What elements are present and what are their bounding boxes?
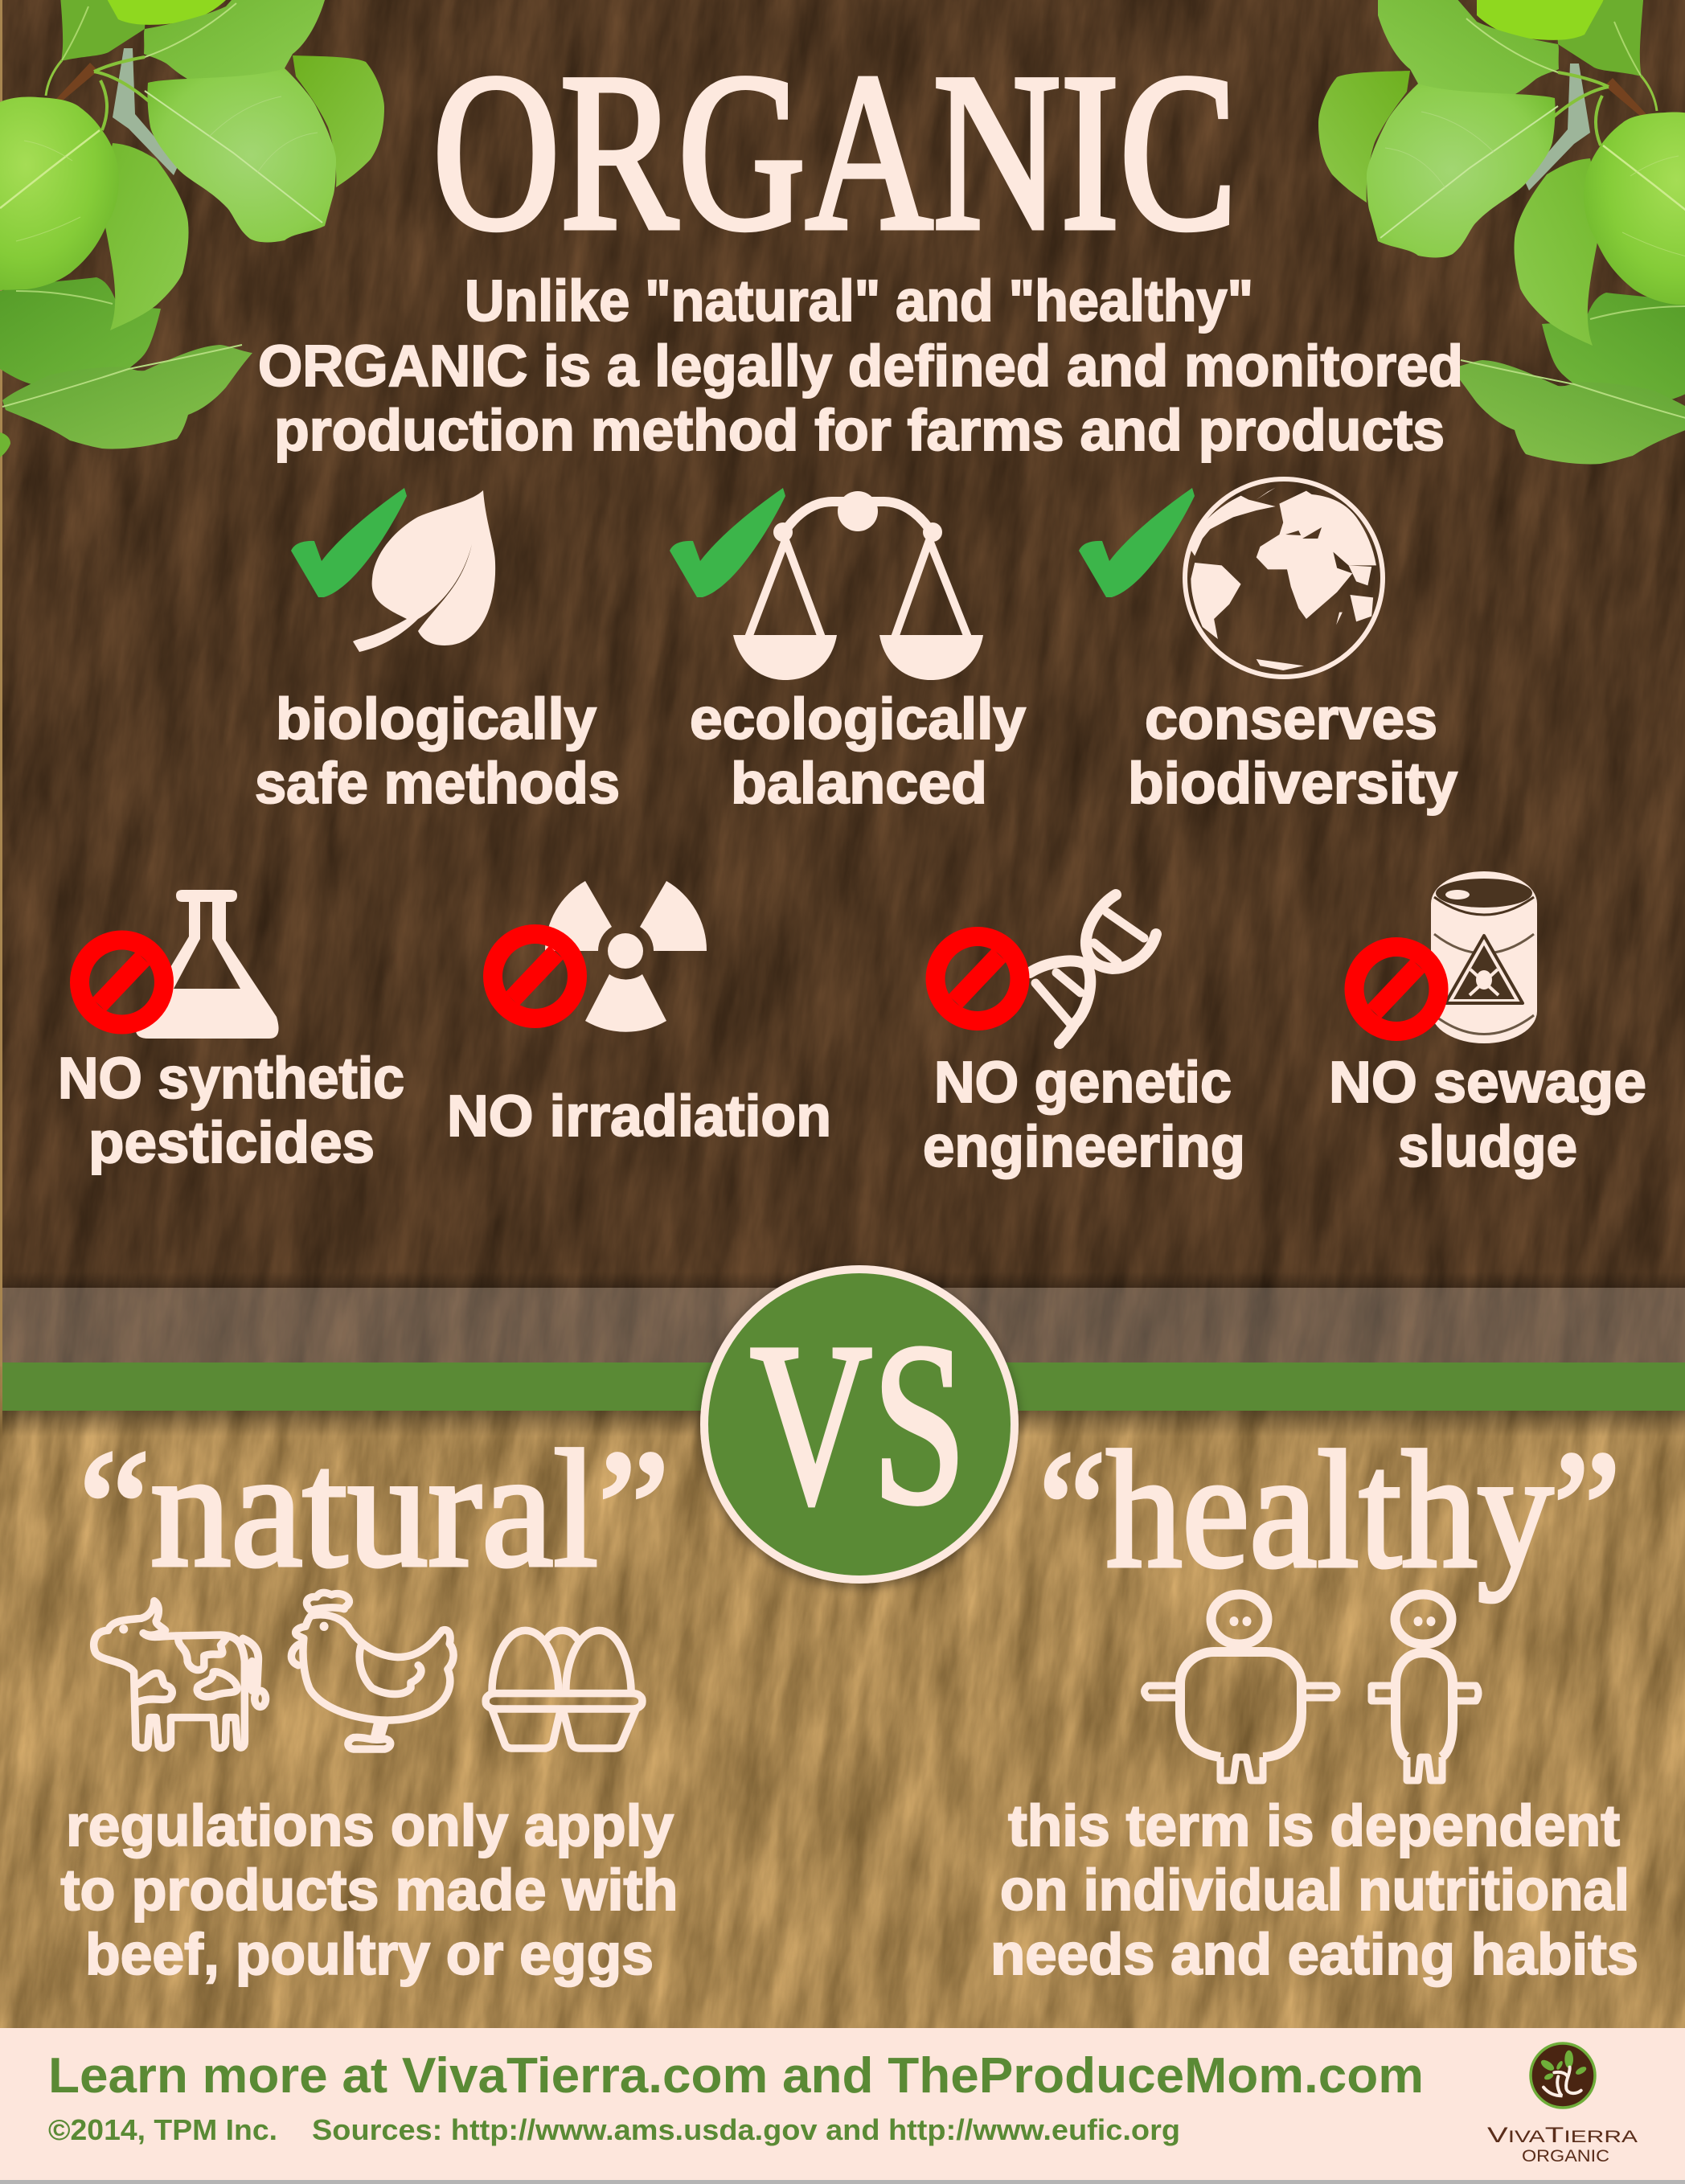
intro text block: Unlike "natural" and "healthy" [465,269,1253,334]
panel: no sewage sludge [1329,871,1646,1179]
icon: balance scale [733,491,983,680]
icon: check mark [670,488,785,597]
label: safe methods [255,752,620,816]
icon: check mark [1079,488,1195,597]
panel: natural [61,1416,679,1987]
leaves: top right cluster [1318,0,1685,473]
icon: dna helix [1030,895,1156,1043]
label: pesticides [88,1111,375,1175]
panel: conserves biodiversity [1079,479,1457,816]
label: balanced [731,752,987,816]
panel: no genetic engineering [923,895,1245,1179]
copyright and sources: ©2014, TPM Inc. [48,2113,277,2146]
panel: biologically safe methods [255,488,620,816]
intro text block [258,269,1463,463]
footer call to action: Learn more at VivaTierra.com and TheProduceMom.com [48,2048,1424,2104]
logo: VivaTierra Organic [1487,2043,1638,2166]
divider band [2,1272,1685,1436]
icon: prohibition sign [493,934,577,1018]
logo: VivaTierra Organic: ORGANIC [1522,2147,1609,2166]
background: brown corrugated panel [836,674,845,683]
label [1128,687,1457,816]
icon: slim figure [1371,1595,1478,1780]
text block: this term is dependent [1008,1794,1620,1858]
VS badge: VS [750,1296,966,1552]
icon: prohibition sign [1354,947,1439,1031]
label [690,687,1026,816]
icon: prohibition sign [936,936,1019,1021]
text block: regulations only apply [66,1794,674,1858]
label: engineering [923,1115,1245,1179]
label: NO irradiation [447,1084,831,1149]
copyright and sources: Sources: http://www.ams.usda.gov and http://www.eufic.org [312,2113,1180,2146]
icon: flask [136,890,279,1039]
label: ecologically [690,687,1026,752]
footer panel [0,2028,1685,2184]
intro text block: production method for farms and products [274,399,1445,463]
title: ORGANIC [433,27,1237,277]
label: NO sewage [1329,1051,1646,1115]
text block: to products made with [61,1858,679,1923]
label [255,687,620,816]
leaves: top left cluster [0,0,384,457]
intro text block: ORGANIC is a legally defined and monitored [258,334,1463,399]
heading: “natural” [79,1416,670,1601]
text block: needs and eating habits [990,1923,1638,1987]
label: NO synthetic [58,1047,404,1111]
text block: on individual nutritional [1000,1858,1630,1923]
icon: check mark [291,488,407,597]
panel: healthy [990,1417,1638,1987]
icon: radiation symbol [545,881,707,1032]
label: conserves [1145,687,1437,752]
panel: ecologically balanced [670,488,1026,816]
icon: egg carton [486,1630,642,1748]
text block [990,1794,1638,1987]
icon: large figure [1145,1595,1337,1780]
VS badge [704,1269,1015,1580]
background: tan corrugated panel [835,1683,845,1692]
icon: cow [94,1601,266,1748]
text block [61,1794,679,1987]
label [1329,1051,1646,1179]
icon: waste barrel [1431,871,1537,1043]
label: sludge [1398,1115,1577,1179]
label: biologically [276,687,597,752]
panel: no irradiation [447,881,831,1149]
label [58,1047,404,1175]
icon: prohibition sign [80,940,164,1024]
label [923,1051,1245,1179]
logo: VivaTierra Organic: V IVA T IERRA [1487,2123,1638,2147]
panel: no synthetic pesticides [58,890,404,1175]
heading: “healthy” [1039,1417,1621,1602]
icon: globe [1185,479,1383,677]
icon: leaf [353,490,495,652]
label: biodiversity [1128,752,1457,816]
icon: hen [291,1592,453,1749]
label: NO genetic [934,1051,1232,1115]
text block: beef, poultry or eggs [85,1923,654,1987]
